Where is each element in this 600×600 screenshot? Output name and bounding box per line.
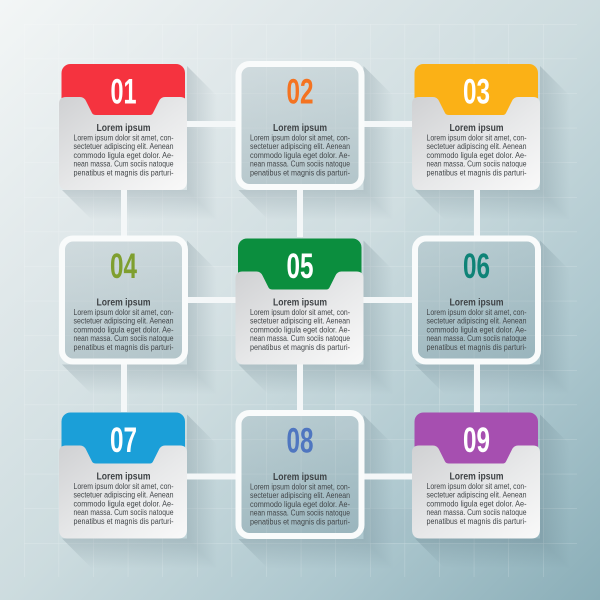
card 04: nean massa. Cum sociis natoque (74, 334, 174, 343)
card 08: 08 (286, 422, 314, 460)
card 07: commodo ligula eget dolor. Ae- (74, 499, 174, 508)
card 04: Lorem ipsum dolor sit amet, con- (74, 308, 174, 317)
card 05: commodo ligula eget dolor. Ae- (250, 325, 350, 334)
card 05: Lorem ipsum (273, 298, 327, 308)
card 06: nean massa. Cum sociis natoque (426, 334, 526, 343)
card 02: commodo ligula eget dolor. Ae- (250, 151, 350, 160)
card 08: penatibus et magnis dis parturi- (250, 517, 350, 526)
card 09: 09 (463, 421, 490, 460)
card 04: 04 (110, 247, 137, 286)
card 07: nean massa. Cum sociis natoque (74, 508, 174, 517)
card 08: sectetuer adipiscing elit. Aenean (250, 491, 350, 500)
card 05: 05 (286, 247, 314, 286)
card 08: Lorem ipsum dolor sit amet, con- (250, 482, 350, 492)
card 02 (238, 64, 362, 187)
card 02: 02 (286, 72, 314, 112)
card 02: nean massa. Cum sociis natoque (250, 160, 350, 169)
card 09: nean massa. Cum sociis natoque (426, 508, 526, 517)
card 04: Lorem ipsum (96, 298, 151, 308)
card 03: nean massa. Cum sociis natoque (426, 160, 526, 169)
card 01: Lorem ipsum dolor sit amet, con- (74, 134, 174, 142)
card 04: penatibus et magnis dis parturi- (74, 343, 174, 352)
card 07 (59, 412, 187, 538)
card 08: commodo ligula eget dolor. Ae- (250, 500, 350, 509)
card 02: Lorem ipsum (273, 123, 327, 134)
card 05: nean massa. Cum sociis natoque (250, 334, 350, 343)
card 07: Lorem ipsum (96, 472, 151, 482)
card 05: penatibus et magnis dis parturi- (250, 343, 350, 352)
card 01: penatibus et magnis dis parturi- (74, 168, 174, 177)
card 06 (415, 238, 538, 362)
card 06: commodo ligula eget dolor. Ae- (426, 325, 527, 334)
card 05: sectetuer adipiscing elit. Aenean (250, 317, 350, 326)
card 07: Lorem ipsum dolor sit amet, con- (74, 482, 174, 491)
card 07: sectetuer adipiscing elit. Aenean (74, 491, 174, 500)
card 09: penatibus et magnis dis parturi- (426, 517, 527, 526)
card 02: sectetuer adipiscing elit. Aenean (250, 142, 350, 151)
card 09: commodo ligula eget dolor. Ae- (426, 499, 527, 508)
card 08: nean massa. Cum sociis natoque (250, 509, 350, 518)
card 08 (238, 413, 362, 536)
card 05 (236, 238, 364, 364)
card 03: penatibus et magnis dis parturi- (426, 168, 527, 177)
card 01: Lorem ipsum (96, 123, 151, 134)
card 03: Lorem ipsum (450, 123, 504, 134)
card 04: sectetuer adipiscing elit. Aenean (74, 317, 174, 326)
card 03: sectetuer adipiscing elit. Aenean (426, 142, 526, 151)
card 06: Lorem ipsum dolor sit amet, con- (426, 308, 527, 317)
card 01 (59, 64, 187, 190)
card 02: Lorem ipsum dolor sit amet, con- (250, 134, 350, 142)
connectors (121, 121, 480, 480)
card 03 (412, 64, 540, 190)
card 06: Lorem ipsum (450, 298, 504, 308)
card 09: sectetuer adipiscing elit. Aenean (426, 491, 526, 500)
card 03: Lorem ipsum dolor sit amet, con- (426, 134, 527, 142)
card 06: sectetuer adipiscing elit. Aenean (426, 317, 526, 326)
card 04: commodo ligula eget dolor. Ae- (74, 325, 174, 334)
card 01: nean massa. Cum sociis natoque (74, 160, 174, 169)
card 04 (62, 238, 185, 362)
card 06: 06 (463, 247, 490, 286)
card 02: penatibus et magnis dis parturi- (250, 168, 350, 177)
card 09 (412, 412, 540, 538)
card 01: commodo ligula eget dolor. Ae- (74, 151, 174, 160)
card 06: penatibus et magnis dis parturi- (426, 343, 527, 352)
long shadows (62, 66, 570, 569)
card 07: 07 (110, 421, 137, 460)
card 03: commodo ligula eget dolor. Ae- (426, 151, 527, 160)
card 03: 03 (463, 72, 490, 112)
card 01: 01 (110, 72, 136, 112)
card 01: sectetuer adipiscing elit. Aenean (74, 142, 174, 151)
card 09: Lorem ipsum dolor sit amet, con- (426, 482, 527, 491)
card 05: Lorem ipsum dolor sit amet, con- (250, 308, 350, 317)
card 09: Lorem ipsum (450, 472, 504, 482)
card 07: penatibus et magnis dis parturi- (74, 517, 174, 526)
card 08: Lorem ipsum (273, 472, 327, 483)
